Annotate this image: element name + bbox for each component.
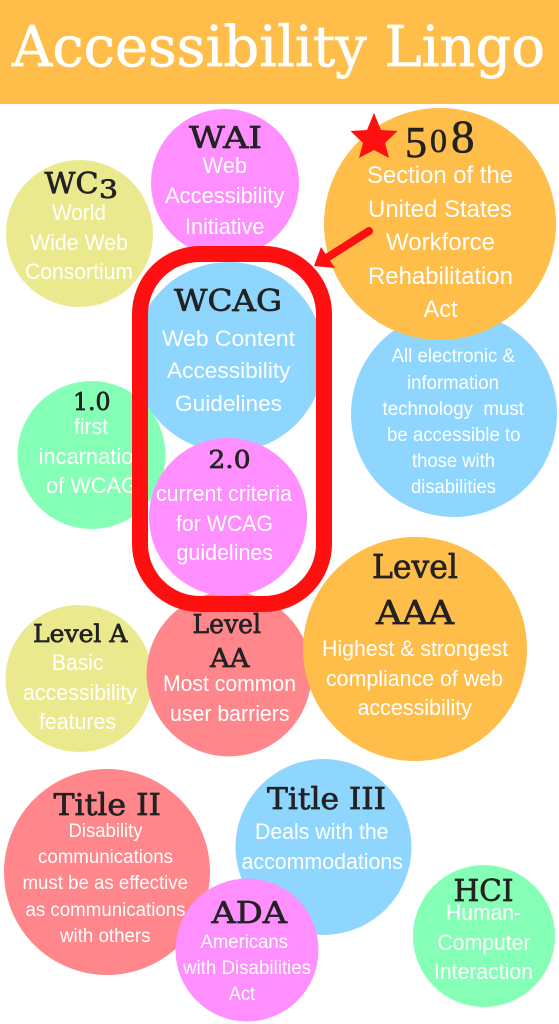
panel: WCAG: Web Content — [162, 326, 295, 351]
panel: HCI — [413, 865, 555, 1007]
panel: Level AAA: AAA — [375, 593, 455, 632]
panel: Level AA: Level — [192, 610, 261, 640]
title banner — [0, 0, 559, 104]
panel: HCI: HCI — [454, 874, 514, 909]
panel: ADA: with Disabilities — [182, 958, 311, 979]
panel: 508: Workforce — [386, 229, 495, 256]
panel: HCI: Human- — [446, 900, 521, 925]
panel: 2.0: guidelines — [176, 540, 273, 565]
panel: WCAG: WCAG — [174, 284, 282, 319]
panel: WCAG: Guidelines — [175, 391, 282, 416]
panel: 508: 0 — [430, 123, 447, 160]
panel: 508 — [324, 108, 556, 340]
panel: Level A: Level A — [33, 620, 128, 648]
panel: Title II: as communications — [26, 900, 186, 921]
panel: WC3 — [6, 160, 153, 307]
panel: WC3: 3 — [99, 175, 118, 204]
panel: 508: 8 — [451, 111, 474, 163]
panel: 508 description: disabilities — [411, 477, 496, 498]
panel: Title II: with others — [59, 926, 150, 947]
panel: 2.0: current criteria — [156, 481, 293, 506]
panel: WC3: Wide Web — [30, 230, 128, 255]
panel: Level A: Basic — [52, 650, 104, 675]
panel: ADA: Americans — [200, 932, 288, 953]
panel: 508: Act — [424, 296, 458, 323]
panel: Level AA: Most common — [163, 671, 296, 696]
panel: Title III: accommodations — [242, 849, 403, 874]
panel: 508: 5 — [405, 118, 427, 167]
panel: Title II: communications — [38, 847, 173, 868]
panel: ADA: ADA — [210, 896, 287, 931]
panel: Level AAA — [303, 537, 527, 761]
panel: Level AAA: Level — [372, 547, 458, 586]
panel: WCAG — [134, 262, 324, 452]
panel: 1.0: 1.0 — [73, 388, 110, 416]
panel: 2.0: 2.0 — [208, 446, 250, 474]
panel: 508 description — [351, 311, 557, 517]
panel: ADA — [176, 878, 318, 1022]
panel: ADA: Act — [229, 984, 256, 1005]
panel: 1.0 — [18, 381, 166, 529]
panel: WC3: World — [52, 200, 106, 225]
panel: WAI: Accessibility — [165, 183, 284, 208]
panel: 508 description: All electronic & — [392, 346, 515, 367]
panel: WAI: WAI — [189, 121, 262, 156]
panel: 508 description: information — [407, 373, 499, 394]
panel: Title II: Title II — [54, 788, 161, 823]
panel: WAI: Web — [202, 153, 247, 178]
panel: HCI: Computer — [438, 930, 530, 955]
panel: Level AAA: Highest & strongest — [322, 636, 508, 661]
icon: red star — [350, 113, 398, 158]
panel: 1.0: first — [74, 414, 108, 439]
panel: Title II: Disability — [68, 821, 143, 842]
panel: WAI: Initiative — [185, 214, 264, 239]
panel: Level AA: user barriers — [170, 701, 290, 726]
panel: WAI — [151, 109, 299, 257]
panel: Level A: accessibility — [23, 680, 137, 705]
panel: HCI: Interaction — [434, 959, 533, 984]
panel: Title II: must be as effective — [22, 873, 188, 894]
title banner: Accessibility Lingo — [11, 15, 545, 80]
panel: 508 description: be accessible to — [387, 425, 520, 446]
panel: Title III: Title III — [267, 782, 386, 817]
panel: 2.0: for WCAG — [176, 511, 273, 536]
panel: 508 description: technology must — [382, 399, 525, 420]
panel: 2.0 — [149, 438, 307, 596]
panel: 1.0: incarnation — [38, 444, 146, 469]
panel: 508: Section of the — [367, 162, 513, 189]
panel: 508: Rehabilitation — [368, 263, 513, 290]
panel: 1.0: of WCAG — [46, 473, 138, 498]
panel: WC3: WC — [44, 166, 98, 200]
panel: Level AAA: accessibility — [358, 695, 472, 720]
panel: 508: United States — [368, 196, 512, 223]
panel: Level AA — [146, 592, 312, 756]
callout: red rounded frame — [140, 254, 324, 604]
panel: WC3: Consortium — [25, 259, 133, 284]
panel: Title II — [4, 769, 210, 975]
panel: Level AAA: compliance of web — [326, 666, 503, 691]
panel: Level A: features — [39, 709, 116, 734]
panel: Level AA: AA — [209, 644, 251, 674]
panel: Level A — [6, 605, 152, 752]
panel: WCAG: Accessibility — [167, 358, 290, 383]
panel: Title III — [236, 759, 412, 935]
panel: 508 description: those with — [412, 451, 495, 472]
arrow: 508 to WCAG — [314, 231, 369, 268]
panel: Title III: Deals with the — [255, 819, 388, 844]
